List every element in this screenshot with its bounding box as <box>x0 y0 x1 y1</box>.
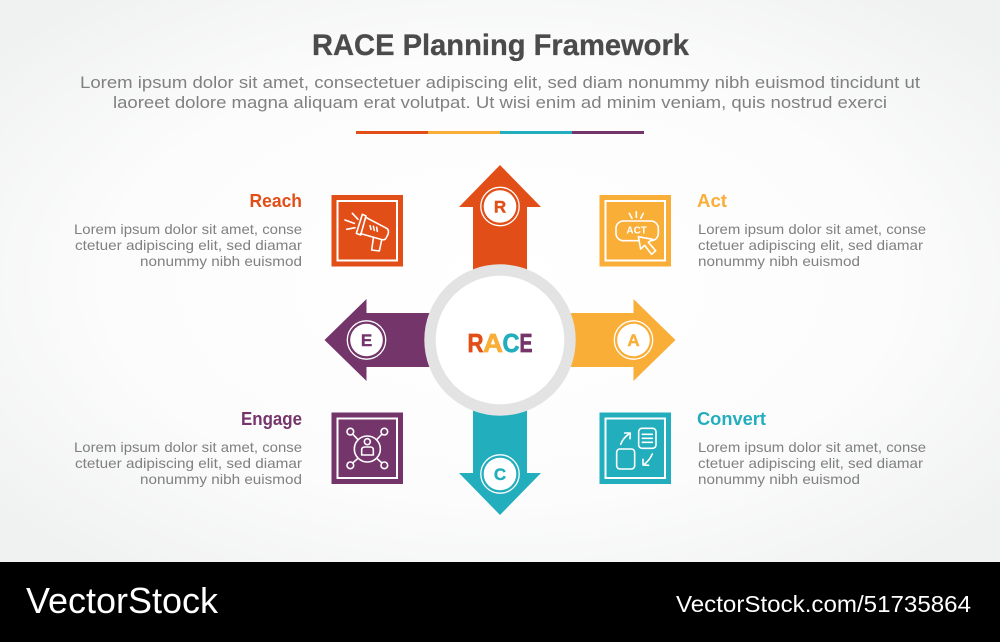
footer band: VectorStock.com/51735864 <box>676 591 971 617</box>
arrow: A right <box>560 299 676 381</box>
footer band <box>0 562 1000 642</box>
text block: Engage: ctetuer adipiscing elit, sed diamar <box>75 455 302 471</box>
arrow: C down <box>459 400 541 515</box>
text block: Convert: nonummy nibh euismod <box>698 471 860 487</box>
title underline bar <box>356 131 644 134</box>
arrow: R up <box>459 165 541 280</box>
centre circle: C <box>502 328 520 358</box>
arrow: E left: E <box>361 331 372 350</box>
subtitle: laoreet dolore magna aliquam erat volutpat. Ut wisi enim ad minim veniam, quis nostrud exerci <box>113 93 887 112</box>
subtitle: Lorem ipsum dolor sit amet, consectetuer adipiscing elit, sed diam nonummy nibh euismod tincidunt ut <box>80 73 920 92</box>
centre circle <box>430 270 570 410</box>
footer band: VectorStock <box>26 580 219 621</box>
arrow: A right: A <box>627 331 640 350</box>
text block: Act: nonummy nibh euismod <box>698 253 860 269</box>
text block: Act: Act <box>697 191 727 211</box>
centre circle: E <box>520 328 532 358</box>
text block: Engage: nonummy nibh euismod <box>140 471 302 487</box>
text block: Act <box>697 191 926 269</box>
icon: act button (Act): ACT <box>626 226 647 237</box>
text block: Reach: ctetuer adipiscing elit, sed diamar <box>75 237 302 253</box>
text block: Act: ctetuer adipiscing elit, sed diamar <box>698 237 923 253</box>
title: RACE Planning Framework <box>312 29 689 62</box>
icon: conversion documents (Convert) <box>600 412 671 484</box>
icon: network person (Engage) <box>332 412 403 484</box>
text block: Engage: Lorem ipsum dolor sit amet, conse <box>74 439 302 455</box>
text block: Convert: ctetuer adipiscing elit, sed diamar <box>698 455 923 471</box>
text block: Engage: Engage <box>241 409 302 429</box>
text block: Convert: Convert <box>697 409 766 429</box>
text block: Convert: Lorem ipsum dolor sit amet, conse <box>698 439 926 455</box>
text block: Engage <box>74 409 302 487</box>
arrow: R up: R <box>494 198 506 216</box>
centre circle: R <box>468 328 484 358</box>
icon: megaphone (Reach) <box>332 195 403 266</box>
text block: Convert <box>697 409 926 487</box>
text block: Act: Lorem ipsum dolor sit amet, conse <box>698 221 926 237</box>
text block: Reach <box>74 191 302 269</box>
text block: Reach: Lorem ipsum dolor sit amet, conse <box>74 221 302 237</box>
text block: Reach: nonummy nibh euismod <box>140 253 302 269</box>
text block: Reach: Reach <box>250 191 302 211</box>
centre circle: A <box>483 328 503 358</box>
arrow: C down: C <box>494 465 506 484</box>
arrow: E left <box>324 299 440 381</box>
icon: act button (Act) <box>600 195 671 266</box>
subtitle <box>80 73 920 112</box>
